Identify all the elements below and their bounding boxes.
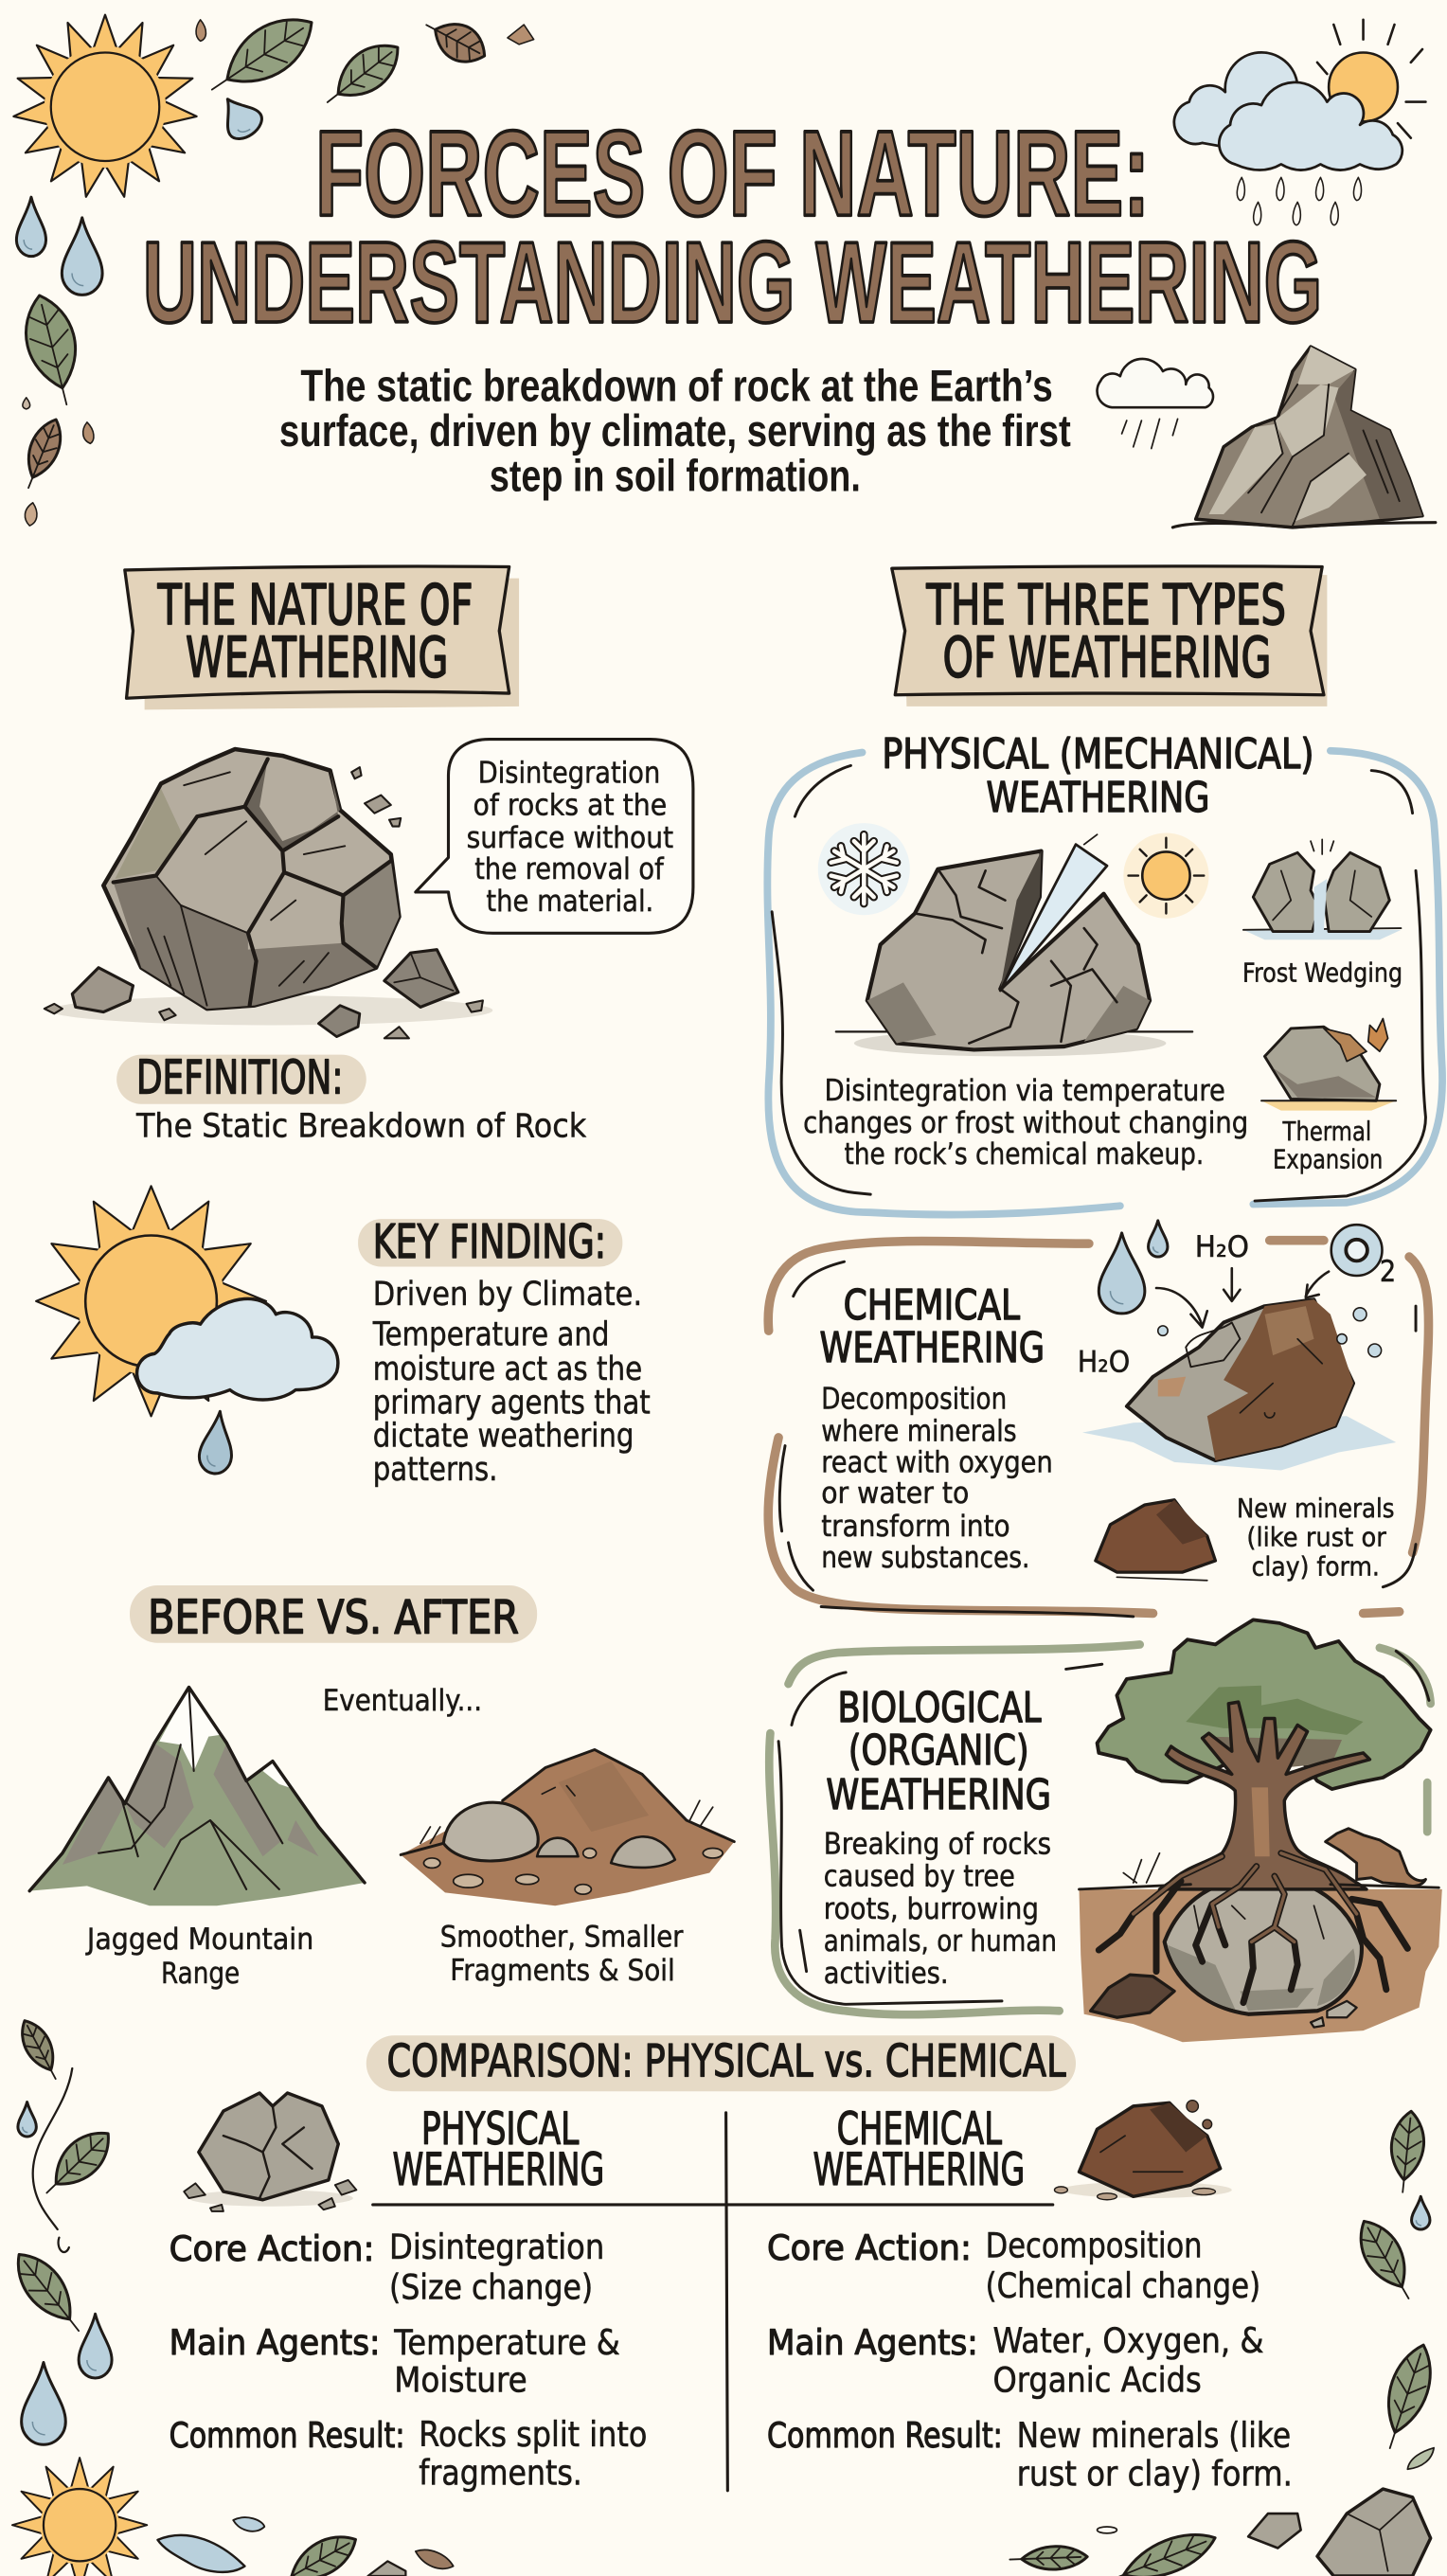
text: biological description: activities. bbox=[824, 1957, 949, 1991]
callout: disintegration definition: Disintegration bbox=[478, 757, 660, 791]
comparison rows: chemical: Water, Oxygen, & bbox=[992, 2320, 1264, 2361]
comparison rows: chemical: rust or clay) form. bbox=[1017, 2454, 1293, 2495]
text: new minerals: (like rust or bbox=[1246, 1521, 1386, 1552]
canopy bbox=[1098, 1619, 1431, 1789]
heading banner: the three types of weathering: THE THREE TYPES bbox=[925, 572, 1286, 637]
illustration: smooth soil mound with rocks bbox=[401, 1749, 734, 1905]
comparison rows: physical: Disintegration bbox=[389, 2227, 604, 2267]
icon: frost wedging rock bbox=[1243, 839, 1401, 939]
definition block: DEFINITION: bbox=[136, 1051, 343, 1104]
frame: chemical panel border bbox=[768, 1241, 1429, 1617]
text: new minerals: New minerals bbox=[1237, 1493, 1394, 1524]
illustration: cracked boulder with debris bbox=[45, 749, 492, 1038]
heading: biological: (ORGANIC) bbox=[849, 1727, 1029, 1775]
illustration: rusting rock in puddle bbox=[1082, 1299, 1396, 1471]
comparison rows: physical: fragments. bbox=[419, 2453, 582, 2494]
comparison rows: chemical bbox=[767, 2225, 1293, 2495]
comparison rows: chemical: Core Action: bbox=[767, 2227, 972, 2268]
icon: small sun bbox=[1123, 832, 1209, 919]
text: eventually: Eventually... bbox=[323, 1684, 482, 1718]
heading banner: the nature of weathering: THE NATURE OF bbox=[157, 572, 473, 637]
key finding block: moisture act as the bbox=[373, 1351, 642, 1388]
decoration: bottom left leaves and drops bbox=[6, 2015, 120, 2444]
icon: small cloud bbox=[1098, 359, 1213, 449]
icon: oxygen molecule: 2 bbox=[1380, 1255, 1396, 1289]
callout: disintegration definition: of rocks at the bbox=[473, 788, 667, 822]
text: chemical description: react with oxygen bbox=[821, 1445, 1053, 1479]
comparison rows: physical: Common Result: bbox=[170, 2415, 405, 2456]
comparison rows: physical: Core Action: bbox=[170, 2228, 374, 2269]
icon: oxygen molecule bbox=[1331, 1225, 1396, 1289]
subtitle: step in soil formation. bbox=[490, 452, 861, 501]
icon: rusty chemical rock bbox=[1054, 2101, 1232, 2200]
text: biological description: caused by tree bbox=[824, 1859, 1015, 1893]
illustration: jagged mountain range bbox=[29, 1688, 365, 1905]
comparison rows: chemical: (Chemical change) bbox=[986, 2265, 1260, 2306]
comparison rows: chemical: Decomposition bbox=[986, 2225, 1203, 2265]
trunk and branches bbox=[1159, 1702, 1369, 1889]
text: physical description: changes or frost without changing bbox=[803, 1106, 1248, 1140]
comparison rows: chemical: Common Result: bbox=[767, 2415, 1003, 2456]
key finding block: patterns. bbox=[373, 1451, 498, 1489]
label: frost wedging: Frost Wedging bbox=[1242, 957, 1402, 988]
icon: sun bottom left bbox=[12, 2458, 147, 2576]
key finding block: Driven by Climate. bbox=[373, 1276, 642, 1314]
subtitle: The static breakdown of rock at the Earth’s bbox=[300, 361, 1053, 410]
comparison rows: physical: Rocks split into bbox=[419, 2414, 647, 2455]
text: biological description: roots, burrowing bbox=[824, 1892, 1039, 1926]
decoration: bottom right leaves, drops, rocks bbox=[1009, 2110, 1441, 2576]
icon: water drops bbox=[1099, 1221, 1168, 1314]
column heading: physical weathering bbox=[393, 2104, 604, 2196]
icon: snowflake bbox=[818, 823, 910, 915]
icon: sun and rain cloud top right bbox=[1174, 20, 1425, 225]
icon: sun top left bbox=[12, 15, 198, 200]
buried rock bbox=[1165, 1876, 1362, 2014]
heading: chemical: WEATHERING bbox=[819, 1325, 1045, 1372]
comparison rows: physical: Moisture bbox=[394, 2360, 527, 2401]
label: thermal expansion: Expansion bbox=[1273, 1143, 1383, 1174]
text: physical description: the rock’s chemical makeup. bbox=[844, 1137, 1204, 1172]
heading: physical bbox=[882, 731, 1314, 822]
comparison rows: physical: (Size change) bbox=[389, 2267, 593, 2308]
text: physical description bbox=[803, 1074, 1248, 1172]
icon: cracked physical rock bbox=[184, 2093, 356, 2211]
heading banner: the nature of weathering bbox=[125, 566, 519, 709]
text: chemical description: or water to bbox=[821, 1476, 969, 1511]
heading banner: the three types of weathering: OF WEATHERING bbox=[943, 625, 1271, 690]
table dividers bbox=[373, 2113, 1053, 2491]
arrows: reactants to rock bbox=[1156, 1268, 1329, 1328]
key finding block: Temperature and bbox=[372, 1316, 609, 1354]
column heading: chemical weathering bbox=[813, 2104, 1025, 2196]
callout: disintegration definition: the removal of bbox=[474, 852, 665, 886]
heading: comparison: COMPARISON: PHYSICAL vs. CHEMICAL bbox=[386, 2037, 1066, 2088]
text: new minerals bbox=[1237, 1493, 1394, 1583]
text: chemical description: transform into bbox=[821, 1510, 1010, 1544]
comparison rows: physical: Temperature & bbox=[393, 2322, 620, 2363]
callout: disintegration definition bbox=[416, 740, 693, 933]
dark rock bbox=[1091, 1975, 1174, 2017]
text: chemical description: Decomposition bbox=[821, 1382, 1007, 1417]
label: H2O top: H₂O bbox=[1195, 1230, 1249, 1264]
panel: biological weathering bbox=[769, 1619, 1442, 2042]
callout: disintegration definition: surface without bbox=[467, 821, 673, 855]
text: new minerals: clay) form. bbox=[1252, 1551, 1380, 1583]
frame: biological panel border bbox=[769, 1644, 1431, 2014]
decoration: bottom left puddles, leaves, rocks bbox=[158, 2517, 454, 2576]
heading banner: the nature of weathering: WEATHERING bbox=[186, 625, 448, 690]
label: thermal expansion: Thermal bbox=[1282, 1116, 1371, 1147]
definition block: The Static Breakdown of Rock bbox=[135, 1107, 586, 1145]
comparison rows: chemical: Main Agents: bbox=[767, 2322, 978, 2363]
small stones bbox=[1311, 2001, 1357, 2028]
key finding block: dictate weathering bbox=[373, 1417, 634, 1455]
icon: mountain top right bbox=[1172, 347, 1436, 528]
key finding block: KEY FINDING: bbox=[373, 1216, 606, 1269]
heading: physical: PHYSICAL (MECHANICAL) bbox=[882, 731, 1314, 778]
text: chemical description: where minerals bbox=[821, 1414, 1017, 1448]
frame: physical panel border bbox=[767, 751, 1442, 1215]
column heading: chemical weathering: WEATHERING bbox=[813, 2145, 1025, 2196]
subtitle: surface, driven by climate, serving as the first bbox=[279, 406, 1071, 456]
icon: rust and clay rock bbox=[1096, 1500, 1215, 1581]
ground line bbox=[1079, 1885, 1438, 1889]
burrowing animal bbox=[1326, 1829, 1425, 1886]
text: physical description: Disintegration via temperature bbox=[825, 1074, 1225, 1108]
panel: chemical weathering bbox=[768, 1221, 1429, 1617]
heading: biological bbox=[826, 1685, 1051, 1819]
roots bbox=[1099, 1853, 1407, 2003]
panel: physical weathering bbox=[767, 731, 1442, 1215]
title bbox=[143, 106, 1322, 347]
labels: soil after: Smoother, Smaller bbox=[440, 1921, 684, 1955]
comparison rows: chemical: New minerals (like bbox=[1017, 2415, 1291, 2456]
icon: sun with cloud and raindrop bbox=[36, 1186, 338, 1476]
text: biological description: Breaking of rocks bbox=[824, 1828, 1051, 1862]
illustration: rock split by ice wedge bbox=[836, 834, 1192, 1056]
labels: mountain before: Jagged Mountain bbox=[85, 1923, 313, 1957]
comparison rows: physical: Main Agents: bbox=[170, 2322, 381, 2363]
soil bbox=[1079, 1889, 1442, 2042]
labels: soil after bbox=[440, 1921, 684, 1988]
heading banner: the three types of weathering bbox=[892, 566, 1327, 707]
callout: disintegration definition: the material. bbox=[486, 885, 653, 919]
labels: soil after: Fragments & Soil bbox=[450, 1954, 675, 1988]
heading: chemical bbox=[819, 1282, 1045, 1372]
illustration: tree roots splitting rock with burrowing animal bbox=[1079, 1619, 1442, 2042]
key finding block bbox=[358, 1216, 651, 1489]
definition block bbox=[116, 1051, 586, 1145]
comparison rows: physical bbox=[170, 2227, 647, 2494]
icon: thermal expansion rock bbox=[1261, 1019, 1396, 1111]
column heading: chemical weathering: CHEMICAL bbox=[837, 2104, 1002, 2156]
heading: physical: WEATHERING bbox=[987, 775, 1209, 822]
text: biological description: animals, or human bbox=[824, 1924, 1057, 1959]
heading: chemical: CHEMICAL bbox=[844, 1282, 1020, 1330]
decoration: left side leaves and drops bbox=[16, 197, 102, 526]
text: chemical description: new substances. bbox=[821, 1541, 1029, 1575]
key finding block: primary agents that bbox=[373, 1385, 651, 1422]
heading: before vs after: BEFORE VS. AFTER bbox=[148, 1591, 519, 1644]
text: chemical description bbox=[821, 1382, 1053, 1575]
heading: biological: WEATHERING bbox=[826, 1772, 1051, 1819]
column heading: physical weathering: PHYSICAL bbox=[421, 2104, 579, 2156]
decoration: top leaves and drops bbox=[196, 3, 534, 145]
comparison rows: chemical: Organic Acids bbox=[992, 2360, 1202, 2401]
labels: mountain before bbox=[85, 1923, 313, 1991]
label: thermal expansion bbox=[1273, 1116, 1383, 1174]
subtitle bbox=[279, 361, 1071, 501]
labels: mountain before: Range bbox=[161, 1957, 240, 1991]
label: H2O left: H₂O bbox=[1078, 1345, 1130, 1379]
heading: biological: BIOLOGICAL bbox=[838, 1685, 1042, 1732]
text: biological description bbox=[824, 1828, 1057, 1991]
column heading: physical weathering: WEATHERING bbox=[393, 2145, 604, 2196]
